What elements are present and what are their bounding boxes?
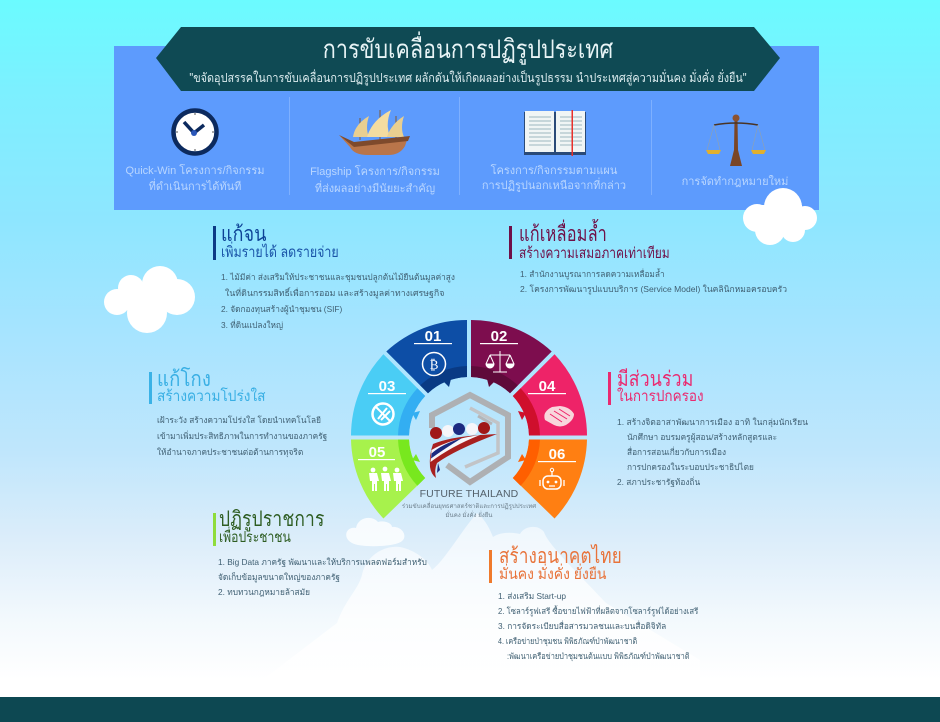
text: 2. โครงการพัฒนารูปแบบบริการ (Service Model) ในคลินิกหมอครอบครัว — [520, 284, 787, 294]
segment 05 — [351, 440, 425, 518]
label: quick-win — [126, 164, 264, 193]
text: สื่อการสอนเกี่ยวกับการเมือง — [627, 447, 726, 457]
text: 2. ทบทวนกฎหมายล้าสมัย — [218, 587, 310, 597]
text: 3. ที่ดินแปลงใหญ่ — [221, 320, 283, 330]
text: 1. ไม้มีค่า ส่งเสริมให้ประชาชนและชุมชนปลูกต้นไม้ยืนต้นมูลค่าสูง — [221, 272, 455, 282]
text: 1. สำนักงานบูรณาการลดความเหลื่อมล้ำ — [520, 269, 665, 279]
subheading quote: "ขจัดอุปสรรคในการขับเคลื่อนการปฏิรูปประเทศ ผลักดันให้เกิดผลอย่างเป็นรูปธรรม นำประเทศสู่ความมั่นคง มั่งคั่ง ยั่งยืน" — [189, 71, 747, 85]
text: 1. Big Data ภาครัฐ พัฒนาและให้บริการแพลตฟอร์มสำหรับ — [218, 557, 427, 567]
panel: blue project panel — [114, 46, 819, 210]
text: เพิ่มรายได้ ลดรายจ่าย — [221, 244, 339, 261]
segment 06: 06 — [549, 446, 565, 463]
segment 01: 01 — [425, 328, 441, 345]
segment 03: 03 — [379, 378, 395, 395]
segment 01 — [386, 320, 467, 393]
segment 04 — [513, 354, 587, 436]
text: การปกครองในระบอบประชาธิปไตย — [627, 462, 754, 472]
text: มั่นคง มั่งคั่ง ยั่งยืน — [499, 566, 606, 583]
icon: scales of justice — [706, 114, 766, 166]
text: 1. ส่งเสริม Start-up — [498, 591, 566, 601]
heading: การขับเคลื่อนการปฏิรูปประเทศ — [323, 34, 613, 64]
icon: ship — [339, 110, 410, 155]
icon: clock — [174, 110, 216, 154]
text: ที่ส่งผลอย่างมีนัยยะสำคัญ — [315, 183, 435, 195]
text: ร่วมขับเคลื่อนยุทธศาสตร์ชาติและการปฏิรูปประเทศ — [402, 503, 536, 510]
label: new laws: การจัดทำกฎหมายใหม่ — [682, 176, 788, 188]
block: anti-corruption — [149, 367, 327, 458]
text: Quick-Win โครงการ/กิจกรรม — [126, 165, 264, 177]
logo: Future Thailand hexagon — [430, 395, 508, 482]
text: สร้างความโปร่งใส — [157, 388, 265, 405]
block: build Thailand's future — [489, 544, 698, 662]
text: :พัฒนาเครือข่ายป่าชุมชนต้นแบบ พิพิธภัณฑ์ป่าพัฒนาชาติ — [507, 651, 690, 661]
logo wordmark: FUTURE THAILAND — [420, 488, 518, 500]
segment 03 — [351, 354, 425, 436]
text: ที่ดำเนินการได้ทันที — [149, 181, 241, 193]
block: reduce inequality — [509, 219, 787, 294]
icon: book — [524, 110, 586, 156]
text: แก้เหลื่อมล้ำ — [519, 223, 607, 246]
text: แก้โกง — [157, 368, 211, 391]
label: flagship — [310, 165, 440, 195]
text: 3. การจัดระเบียบสื่อสารมวลชนและบนสื่อดิจิทัล — [498, 621, 666, 631]
segment 02 — [471, 320, 552, 393]
footer band — [0, 697, 940, 722]
segment 06 — [513, 440, 587, 518]
text: แก้จน — [221, 223, 267, 246]
text: เฝ้าระวัง สร้างความโปร่งใส โดยนำเทคโนโลยี — [157, 415, 321, 425]
text: มั่นคง มั่งคั่ง ยั่งยืน — [446, 512, 492, 519]
text: โครงการ/กิจกรรมตามแผน — [491, 165, 617, 177]
logo tagline — [402, 502, 536, 519]
label: other projects — [482, 164, 626, 192]
text: ให้อำนาจภาคประชาชนต่อต้านการทุจริต — [157, 447, 303, 457]
text: 1. สร้างจิตอาสาพัฒนาการเมือง อาทิ ในกลุ่มนักเรียน — [617, 417, 808, 427]
segment 04: 04 — [539, 378, 556, 395]
segment 01: ₿ — [430, 358, 438, 373]
text: 2. สภาประชารัฐท้องถิ่น — [617, 477, 700, 487]
text: 4. เครือข่ายป่าชุมชน พิพิธภัณฑ์ป่าพัฒนาชาติ — [498, 636, 637, 646]
text: สร้างอนาคตไทย — [499, 545, 622, 568]
text: เข้ามาเพิ่มประสิทธิภาพในการทำงานของภาครัฐ — [157, 431, 327, 441]
block: civil service reform — [213, 508, 427, 597]
text: จัดเก็บข้อมูลขนาดใหญ่ของภาครัฐ — [218, 572, 340, 582]
text: สร้างความเสมอภาคเท่าเทียม — [519, 245, 670, 262]
text: ในการปกครอง — [617, 388, 704, 405]
text: ในที่ดินกรรมสิทธิ์เพื่อการออม และสร้างมูลค่าทางเศรษฐกิจ — [225, 288, 444, 298]
text: 2. โซลาร์รูฟเสรี ซื้อขายไฟฟ้าที่ผลิตจากโซลาร์รูฟได้อย่างเสรี — [498, 606, 698, 616]
text: มีส่วนร่วม — [617, 368, 694, 391]
text: นักศึกษา อบรมครูผู้สอน/สร้างหลักสูตรและ — [627, 432, 777, 442]
segment 02: 02 — [491, 328, 507, 345]
block: participation — [608, 368, 808, 487]
segment 05: 05 — [369, 444, 385, 461]
text: Flagship โครงการ/กิจกรรม — [310, 166, 440, 178]
text: การปฏิรูปนอกเหนือจากที่กล่าว — [482, 180, 626, 192]
block: reduce poverty — [213, 223, 455, 330]
text: 2. จัดกองทุนสร้างผู้นำชุมชน (SIF) — [221, 304, 342, 314]
text: ปฏิรูปราชการ — [219, 508, 325, 531]
text: เพื่อประชาชน — [219, 529, 291, 546]
